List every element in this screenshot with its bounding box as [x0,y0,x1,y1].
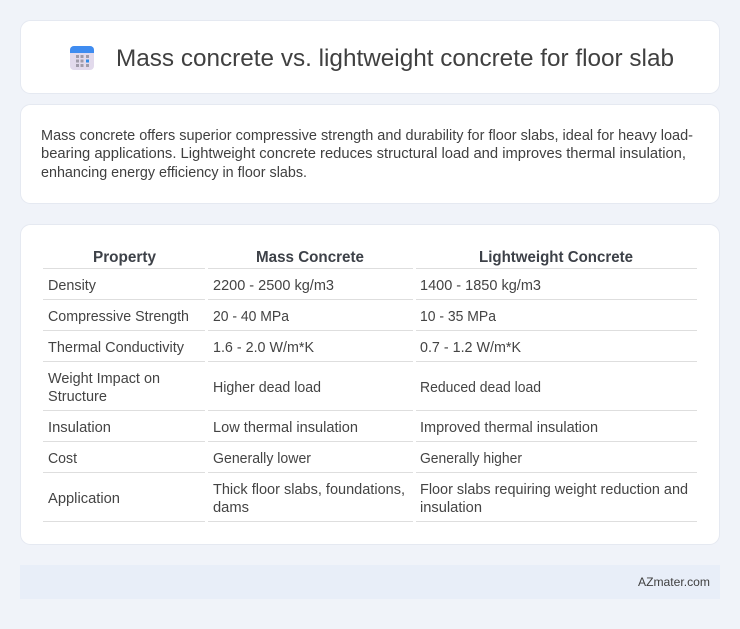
row: weight impact: Weight Impact on [48,371,160,387]
row: density: 2200 - 2500 kg/m3 [213,278,334,294]
row: weight impact: Reduced dead load [420,380,541,396]
table header row: Mass Concrete [256,249,364,266]
row: thermal conductivity [48,340,521,356]
table header row: Property [93,249,156,266]
row: compressive strength: 10 - 35 MPa [420,309,497,325]
row: weight impact: Structure [48,389,107,405]
footer credit: AZmater.com [638,575,710,589]
row: density: Density [48,278,97,294]
row: insulation [48,420,598,436]
row: application: insulation [420,500,482,516]
text block: summary paragraph: bearing applications. Lightweight concrete reduces structural load and improves thermal insulation, [41,146,686,162]
table header row: Lightweight Concrete [479,249,633,266]
row: application: Floor slabs requiring weight reduction and [420,482,688,498]
row: compressive strength: Compressive Strength [48,309,189,325]
row: application: Application [48,491,120,507]
text block: summary paragraph [41,128,693,181]
row: thermal conductivity: Thermal Conductivity [48,340,185,356]
row: insulation: Improved thermal insulation [420,420,598,436]
row: thermal conductivity: 0.7 - 1.2 W/m*K [420,340,521,356]
row: thermal conductivity: 1.6 - 2.0 W/m*K [213,340,314,356]
panel: title header [20,20,720,94]
icon: calendar [70,46,94,70]
row: cost: Generally lower [213,451,311,467]
row: application: dams [213,500,249,516]
row: cost [48,451,522,467]
panel: summary [20,104,720,204]
row: application: Thick floor slabs, foundations, [213,482,405,498]
row: compressive strength [48,309,497,325]
footer [20,565,720,599]
table header row [93,249,633,266]
row: cost: Generally higher [420,451,522,467]
row: cost: Cost [48,451,77,467]
row: compressive strength: 20 - 40 MPa [213,309,290,325]
text block: summary paragraph: enhancing energy efficiency in floor slabs. [41,165,307,181]
row: density [48,278,541,294]
text block: summary paragraph: Mass concrete offers superior compressive strength and durability for floor slabs, ideal for heavy load- [41,128,693,144]
row: weight impact: Higher dead load [213,380,321,396]
row: insulation: Insulation [48,420,111,436]
title: Mass concrete vs. lightweight concrete for floor slab [116,45,674,72]
panel: comparison table [20,224,720,544]
row: application [48,482,688,516]
row: density: 1400 - 1850 kg/m3 [420,278,541,294]
row: insulation: Low thermal insulation [213,420,358,436]
row: weight impact [48,371,541,405]
